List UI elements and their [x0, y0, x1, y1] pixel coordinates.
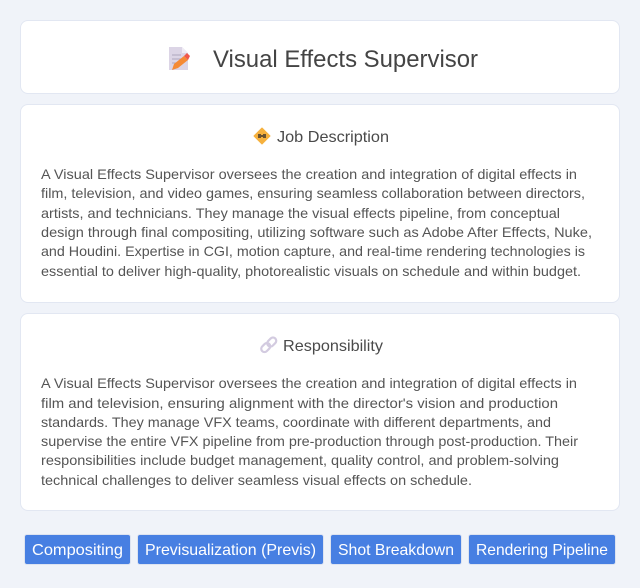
text block: job description: A Visual Effects Supervisor oversees the creation and integration of digital effects in: [41, 166, 577, 182]
text block: responsibility: standards. They manage VFX teams, coordinate with different departments, and: [41, 414, 551, 430]
text block: job description: artists, and technicians. They manage the visual effects pipeline, from conceptual: [41, 205, 560, 221]
text block: job description: film, television, and video games, ensuring seamless collaboration between directors,: [41, 185, 585, 201]
title: Visual Effects Supervisor: [213, 46, 478, 73]
text block: job description: [41, 166, 592, 279]
text block: responsibility: A Visual Effects Supervisor oversees the creation and integration of digital effects in: [41, 375, 577, 391]
tag: shot breakdown: [330, 534, 462, 565]
tag labels: Rendering Pipeline: [476, 542, 608, 559]
icon: document with pencil: [169, 47, 190, 70]
text block: job description: design through final compositing, utilizing software such as Adobe After Effects, Nuke,: [41, 224, 592, 240]
tag labels: Compositing: [32, 542, 123, 559]
icon: chain link: [260, 336, 278, 353]
tag: rendering pipeline: [468, 534, 616, 565]
text block: job description: essential to deliver high-quality, photorealistic visuals on schedule and within budget.: [41, 263, 581, 279]
heading: job description: Job Description: [277, 129, 389, 146]
tag: compositing: [24, 534, 131, 565]
tag labels: Previsualization (Previs): [145, 542, 316, 559]
text block: job description: and Houdini. Expertise in CGI, motion capture, and real-time rendering technologies is: [41, 243, 585, 259]
heading: responsibility: Responsibility: [283, 338, 383, 355]
tag: previsualization: [137, 534, 324, 565]
text block: responsibility: responsibilities include budget management, quality control, and problem-solving: [41, 452, 559, 468]
tag labels: Shot Breakdown: [338, 542, 454, 559]
text block: responsibility: film and television, ensuring alignment with the director's vision and production: [41, 395, 558, 411]
text block: responsibility: supervise the entire VFX pipeline from pre-production through post-production. Their: [41, 433, 578, 449]
text block: responsibility: [41, 375, 578, 488]
panel: job description card: [20, 104, 620, 303]
text block: responsibility: technical challenges to deliver seamless visual effects on schedule.: [41, 472, 472, 488]
panel: responsibility card: [20, 313, 620, 511]
icon: job description diamond: [254, 128, 270, 144]
panel: title card: [20, 20, 620, 94]
